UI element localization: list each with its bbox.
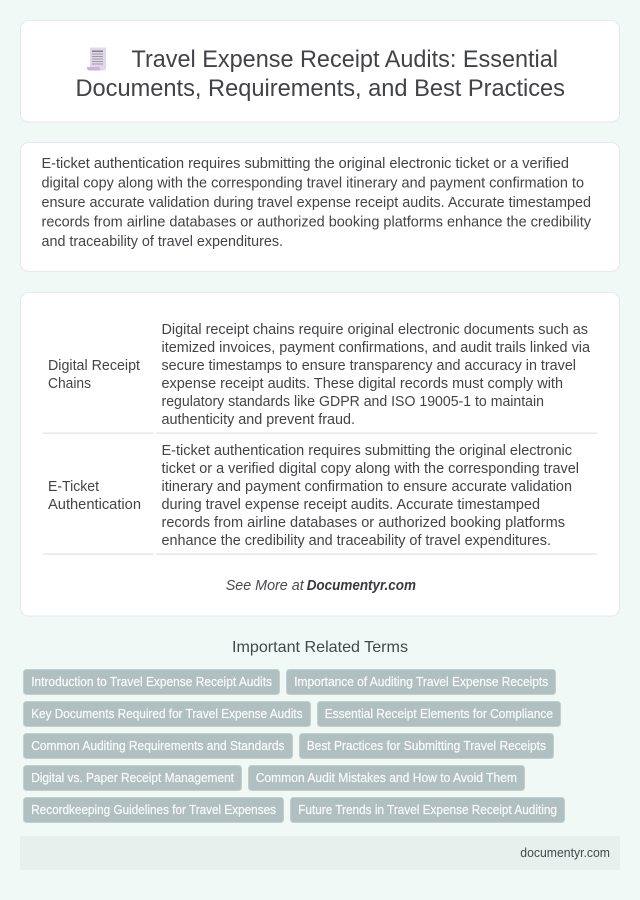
row label: Chains <box>48 376 91 392</box>
panel: summary paragraph <box>20 142 620 272</box>
tag <box>24 670 280 694</box>
tag: Key Documents Required for Travel Expense Audits <box>31 707 302 721</box>
text block: summary: digital copy along with the corresponding travel itinerary and payment confirmation to <box>42 176 584 192</box>
row description <box>162 443 579 549</box>
text block: summary: and traceability of travel expenditures. <box>42 234 283 250</box>
row description: E-ticket authentication requires submitting the original electronic <box>162 443 572 459</box>
text block: summary: ensure accurate validation during travel expense receipt audits. Accurate timestamped <box>42 195 591 211</box>
tag <box>290 798 564 822</box>
tag <box>24 798 284 822</box>
row description: enhance the credibility and traceability of travel expenditures. <box>162 533 551 549</box>
row description: during travel expense receipt audits. Accurate timestamped <box>162 497 540 513</box>
panel: details table <box>20 292 620 616</box>
tag: Importance of Auditing Travel Expense Receipts <box>294 675 548 689</box>
row label: E-Ticket <box>48 479 99 495</box>
tag <box>24 766 242 790</box>
title <box>76 46 565 102</box>
icon: receipt <box>87 48 106 70</box>
table row: Digital Receipt Chains <box>43 322 597 434</box>
text block: summary <box>42 156 592 250</box>
see more link: Documentyr.com <box>307 578 416 594</box>
table row: E-Ticket Authentication <box>43 443 597 555</box>
row description: records from airline databases or authorized booking platforms <box>162 515 565 531</box>
tag <box>300 734 554 758</box>
tag <box>24 702 310 726</box>
row description: regulatory standards like GDPR and ISO 19005-1 to maintain <box>162 394 544 410</box>
tag: Essential Receipt Elements for Compliance <box>325 707 553 721</box>
row label: Authentication <box>48 497 141 513</box>
tag: Recordkeeping Guidelines for Travel Expenses <box>31 803 276 817</box>
tag <box>248 766 524 790</box>
row description: Digital receipt chains require original electronic documents such as <box>162 322 588 338</box>
tag <box>24 734 292 758</box>
row description: secure timestamps to ensure transparency and accuracy in travel <box>162 358 576 374</box>
footer bar <box>20 836 620 870</box>
row description: authenticity and prevent fraud. <box>162 412 355 428</box>
tag <box>318 702 560 726</box>
heading: related terms: Important Related Terms <box>232 639 408 656</box>
row description: expense receipt audits. These digital records must comply with <box>162 376 563 392</box>
panel: title header <box>20 20 620 122</box>
row description: itinerary and payment confirmation to ensure accurate validation <box>162 479 572 495</box>
title: Travel Expense Receipt Audits: Essential <box>132 46 558 73</box>
tag: Introduction to Travel Expense Receipt Audits <box>31 675 272 689</box>
tag: Best Practices for Submitting Travel Receipts <box>307 739 546 753</box>
see more link: See More at <box>226 578 305 594</box>
tag <box>286 670 556 694</box>
row label: Digital Receipt <box>48 358 140 374</box>
text block: summary: E-ticket authentication requires submitting the original electronic ticket or a verified <box>42 156 569 172</box>
tag: Digital vs. Paper Receipt Management <box>31 771 234 785</box>
row description <box>162 322 590 428</box>
row description: ticket or a verified digital copy along with the corresponding travel <box>162 461 579 477</box>
footer bar: documentyr.com <box>520 845 610 860</box>
related term tags <box>24 670 564 822</box>
text block: summary: records from airline databases or authorized booking platforms enhance the credibility <box>42 214 592 230</box>
row description: itemized invoices, payment confirmations, and audit trails linked via <box>162 340 590 356</box>
see more link <box>226 578 416 594</box>
tag: Common Auditing Requirements and Standards <box>31 739 285 753</box>
title: Documents, Requirements, and Best Practices <box>76 75 565 102</box>
row label <box>48 358 140 392</box>
row label <box>48 479 141 513</box>
tag: Common Audit Mistakes and How to Avoid Them <box>256 771 517 785</box>
tag: Future Trends in Travel Expense Receipt Auditing <box>298 803 557 817</box>
